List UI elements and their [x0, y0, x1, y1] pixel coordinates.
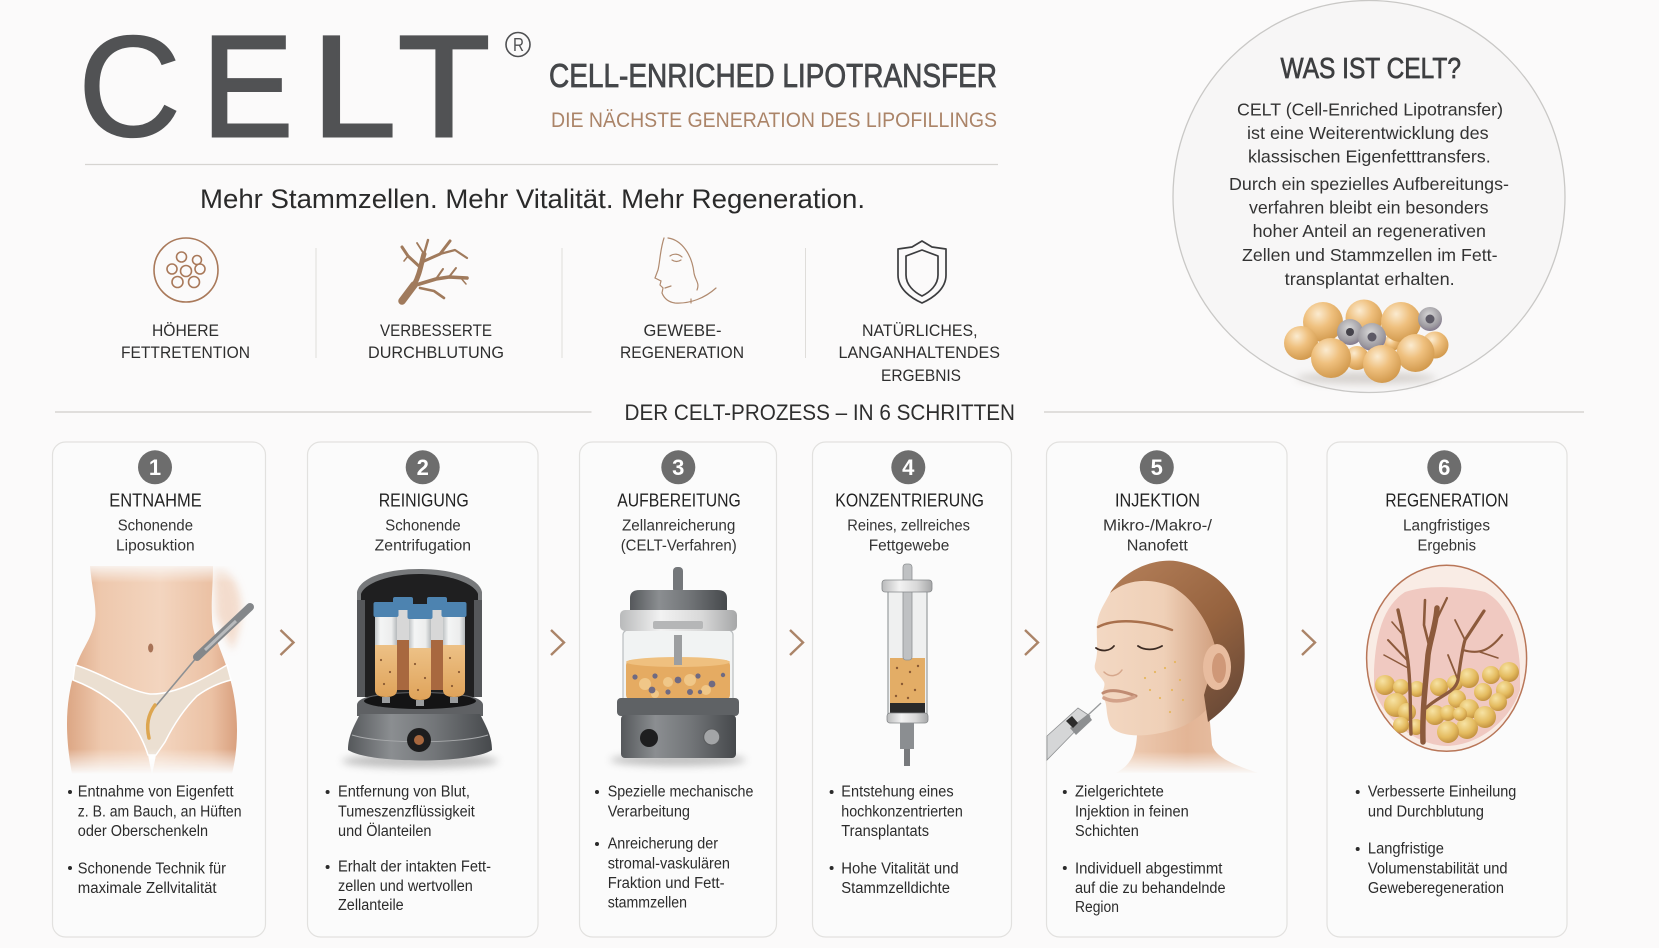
- step number 6: 6: [1438, 455, 1450, 480]
- text block: step 3 details: stammzellen: [608, 894, 687, 911]
- label: Höhere Fettretention: HÖHERE: [152, 321, 219, 340]
- text block: step 5 details: Zielgerichtete: [1075, 784, 1164, 801]
- text block: CELT description: CELT (Cell-Enriched Lipotransfer): [1237, 100, 1503, 120]
- benefit: natural long-lasting result: [838, 241, 1000, 385]
- logo: CELT wordmark: T: [398, 6, 490, 167]
- step number 5: 5: [1151, 455, 1163, 480]
- text block: CELT description: klassischen Eigenfetttransfers.: [1248, 147, 1491, 167]
- step title: AUFBEREITUNG: [617, 491, 741, 511]
- illustration: fat and stem cell cluster: [1284, 300, 1448, 384]
- step subtitle: Schonende: [385, 518, 461, 535]
- icon: shield: [898, 241, 946, 303]
- step number 4: [891, 450, 925, 484]
- text block: step 4 details: Transplantats: [841, 823, 929, 840]
- text block: step 3 details: [595, 784, 753, 911]
- step subtitle: (CELT-Verfahren): [621, 537, 737, 554]
- panel: step 3 Aufbereitung: [580, 442, 776, 937]
- label: Natürliches, langanhaltendes Ergebnis: ERGEBNIS: [881, 366, 961, 385]
- step subtitle: [1103, 518, 1213, 554]
- step subtitle: Fettgewebe: [869, 537, 949, 554]
- label: Höhere Fettretention: [121, 321, 250, 362]
- label: Gewebe-Regeneration: [620, 321, 744, 362]
- step title: ENTNAHME: [109, 491, 202, 511]
- logo: CELT wordmark: E: [202, 6, 293, 167]
- panel: step 4 Konzentrierung: [812, 442, 1012, 937]
- panel: what is CELT circle: [1173, 0, 1565, 392]
- text block: step 6 details: und Durchblutung: [1368, 804, 1484, 821]
- text block: step 1 details: Entnahme von Eigenfett: [78, 784, 234, 801]
- heading: process section: DER CELT-PROZESS – IN 6 SCHRITTEN: [624, 400, 1015, 425]
- text block: step 3 details: Spezielle mechanische: [608, 784, 753, 801]
- text block: CELT description: hoher Anteil an regenerativen: [1253, 221, 1486, 241]
- illustration: abdomen with cannula: [67, 566, 250, 775]
- step subtitle: [116, 518, 195, 554]
- step subtitle: Zentrifugation: [375, 537, 471, 554]
- vessels: [1384, 598, 1502, 742]
- text block: step 4 details: Stammzelldichte: [841, 880, 950, 897]
- front tubes: [374, 602, 466, 706]
- label: Gewebe-Regeneration: REGENERATION: [620, 343, 744, 362]
- benefit: higher fat retention: [121, 238, 250, 362]
- step number 2: 2: [417, 455, 429, 480]
- icon: vessel tree: [402, 240, 467, 301]
- subheading: next generation of lipofilling: DIE NÄCHSTE GENERATION DES LIPOFILLINGS: [551, 109, 997, 132]
- step title: KONZENTRIERUNG: [835, 491, 984, 511]
- text block: step 2 details: Tumeszenzflüssigkeit: [338, 804, 475, 821]
- text block: CELT description: Durch ein spezielles Aufbereitungs-: [1229, 174, 1509, 194]
- icon: cells in circle: [154, 238, 218, 302]
- step number 6: [1427, 450, 1461, 484]
- step number 3: [661, 450, 695, 484]
- step subtitle: Nanofett: [1127, 537, 1189, 554]
- label: Natürliches, langanhaltendes Ergebnis: NATÜRLICHES,: [862, 321, 978, 340]
- panel: step 2 Reinigung: [308, 442, 538, 937]
- tagline: Mehr Stammzellen. Mehr Vitalität. Mehr Regeneration.: [200, 184, 865, 214]
- step subtitle: Reines, zellreiches: [847, 518, 970, 535]
- text block: step 4 details: Entstehung eines: [841, 784, 954, 801]
- step number 5: [1140, 450, 1174, 484]
- step subtitle: Schonende: [118, 518, 193, 535]
- text block: step 3 details: stromal-vaskulären: [608, 855, 730, 872]
- text block: step 2 details: zellen und wertvollen: [338, 878, 473, 895]
- illustration: face with injection: [1047, 561, 1258, 773]
- text block: step 1 details: oder Oberschenkeln: [78, 823, 208, 840]
- heading: Cell-Enriched Lipotransfer: CELL-ENRICHED LIPOTRANSFER: [549, 58, 997, 95]
- text block: step 5 details: Region: [1075, 899, 1119, 916]
- logo: CELT wordmark: [78, 6, 530, 167]
- logo: CELT wordmark: L: [312, 6, 396, 167]
- step subtitle: Mikro-/Makro-/: [1103, 518, 1213, 535]
- arrow 1 to 2: [280, 630, 294, 655]
- step number 2: [406, 450, 440, 484]
- text block: step 1 details: Schonende Technik für: [78, 860, 226, 877]
- text block: step 6 details: Verbesserte Einheilung: [1368, 784, 1516, 801]
- step number 1: 1: [149, 455, 161, 480]
- label: Verbesserte Durchblutung: DURCHBLUTUNG: [368, 343, 504, 362]
- syringe: [1047, 703, 1101, 760]
- label: Natürliches, langanhaltendes Ergebnis: LANGANHALTENDES: [838, 343, 1000, 362]
- fat cells: [1375, 662, 1519, 743]
- step number 1: [138, 450, 172, 484]
- text block: CELT description: ist eine Weiterentwicklung des: [1247, 123, 1489, 143]
- step subtitle: Ergebnis: [1418, 537, 1476, 554]
- label: Verbesserte Durchblutung: VERBESSERTE: [380, 321, 492, 340]
- text block: step 5 details: auf die zu behandelnde: [1075, 880, 1226, 897]
- text block: step 6 details: [1356, 784, 1516, 897]
- label: Natürliches, langanhaltendes Ergebnis: [838, 321, 1000, 385]
- step subtitle: [621, 518, 737, 554]
- text block: step 1 details: maximale Zellvitalität: [78, 880, 217, 897]
- text block: step 5 details: Schichten: [1075, 823, 1139, 840]
- facial features: [1096, 621, 1172, 701]
- text block: step 5 details: [1063, 784, 1226, 916]
- text block: step 3 details: Verarbeitung: [608, 804, 690, 821]
- back tubes: [393, 597, 447, 690]
- text block: step 2 details: und Ölanteilen: [338, 822, 432, 840]
- heading: Was ist CELT?: WAS IST CELT?: [1280, 53, 1461, 85]
- arrow 5 to 6: [1302, 630, 1315, 655]
- step subtitle: [375, 518, 471, 554]
- logo: CELT wordmark: R: [513, 35, 524, 55]
- illustration: processing device: [610, 567, 746, 766]
- step subtitle: [847, 518, 970, 554]
- step title: REINIGUNG: [379, 491, 469, 511]
- text block: step 6 details: Volumenstabilität und: [1368, 860, 1508, 877]
- text block: step 1 details: [68, 784, 242, 897]
- panel: step 1 Entnahme: [52, 442, 266, 937]
- benefit: improved circulation: [368, 240, 504, 362]
- text block: step 5 details: Individuell abgestimmt: [1075, 860, 1223, 877]
- step subtitle: Zellanreicherung: [622, 518, 735, 535]
- step title: INJEKTION: [1115, 491, 1200, 511]
- illustration: syringe with fat: [882, 564, 932, 766]
- label: Verbesserte Durchblutung: [368, 321, 504, 362]
- benefit: tissue regeneration: [620, 238, 744, 362]
- text block: step 3 details: Anreicherung der: [608, 836, 718, 853]
- step number 4: 4: [902, 455, 915, 480]
- text block: step 2 details: [326, 784, 491, 914]
- icon: face profile: [655, 238, 716, 303]
- step number 3: 3: [672, 455, 684, 480]
- text block: CELT description: [1229, 100, 1509, 289]
- text block: step 1 details: z. B. am Bauch, an Hüften: [78, 804, 242, 821]
- logo: CELT wordmark: C: [78, 6, 181, 167]
- panel: step 5 Injektion: [1046, 442, 1287, 937]
- label: Höhere Fettretention: FETTRETENTION: [121, 343, 250, 362]
- text block: step 6 details: Langfristige: [1368, 841, 1444, 858]
- arrow 2 to 3: [551, 630, 564, 655]
- text block: step 4 details: hochkonzentrierten: [841, 804, 963, 821]
- text block: step 5 details: Injektion in feinen: [1075, 804, 1189, 821]
- illustration: centrifuge: [342, 569, 498, 768]
- text block: CELT description: Zellen und Stammzellen im Fett-: [1242, 245, 1498, 265]
- text block: step 4 details: [830, 784, 963, 897]
- text block: step 2 details: Zellanteile: [338, 897, 404, 914]
- step subtitle: Liposuktion: [116, 537, 195, 554]
- illustration: tissue with vessels and fat cells: [1367, 565, 1527, 751]
- text block: step 2 details: Erhalt der intakten Fett-: [338, 859, 491, 876]
- text block: step 6 details: Geweberegeneration: [1368, 880, 1504, 897]
- arrow 3 to 4: [790, 630, 803, 655]
- panel: step 6 Regeneration: [1327, 442, 1567, 937]
- text block: step 4 details: Hohe Vitalität und: [841, 860, 959, 877]
- label: Gewebe-Regeneration: GEWEBE-: [644, 321, 722, 340]
- arrow 4 to 5: [1025, 630, 1038, 655]
- step subtitle: Langfristiges: [1403, 518, 1490, 535]
- step subtitle: [1403, 518, 1490, 554]
- text block: step 2 details: Entfernung von Blut,: [338, 784, 470, 801]
- text block: CELT description: transplantat erhalten.: [1285, 269, 1455, 289]
- text block: step 3 details: Fraktion und Fett-: [608, 875, 725, 892]
- step title: REGENERATION: [1385, 491, 1509, 511]
- text block: CELT description: verfahren bleibt ein besonders: [1249, 198, 1489, 218]
